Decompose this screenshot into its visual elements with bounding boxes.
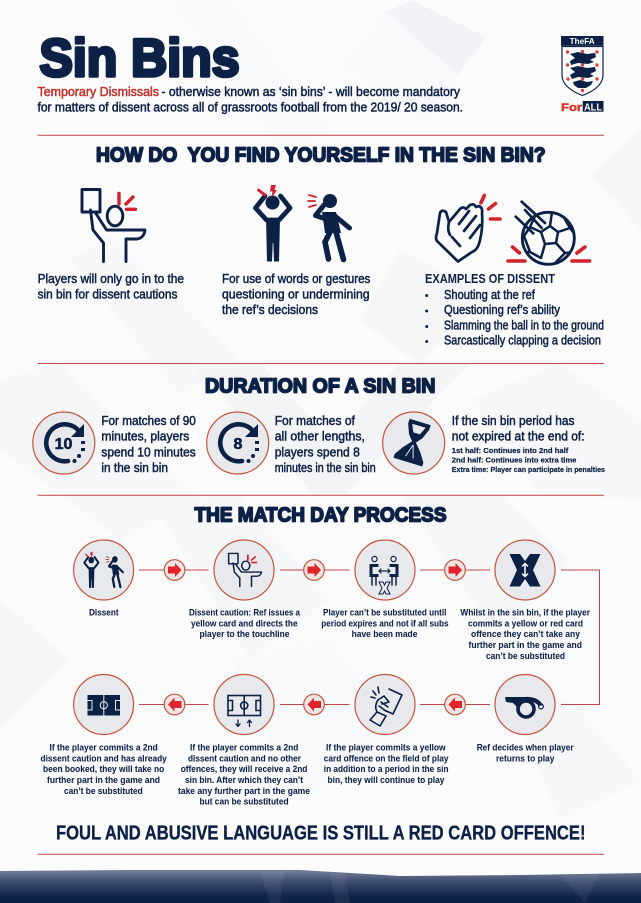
step: 2nd sin bin, outlined pitch: dissent caution and no other <box>188 752 301 764</box>
heading: duration of a sin bin: DURATION OF A SIN BIN <box>205 375 435 398</box>
step: 2nd caution already booked, filled pitch: can’t be substituted <box>64 785 143 796</box>
text: dissent cautions: Players will only go in to the <box>38 271 184 286</box>
panel: 90 minute matches <box>33 412 196 475</box>
step: substitution: have been made <box>352 628 417 639</box>
text: 8 minutes: players spend 8 <box>275 444 360 460</box>
step: dissent caution: yellow card and directs the <box>191 618 298 628</box>
heading: how do you find yourself in the sin bin: HOW DO YOU FIND YOURSELF IN THE SIN BIN? <box>96 144 546 167</box>
step: substitution: period expires and not if all subs <box>321 618 448 628</box>
icon: angry players <box>256 185 350 262</box>
step: ref decides, whistle: Ref decides when player <box>477 742 574 752</box>
step: substitution: Player can’t be substituted until <box>323 606 446 618</box>
logo: The FA For All crest <box>561 36 604 114</box>
icon: hourglass <box>383 412 445 474</box>
text: words or gestures: the ref’s decisions <box>222 302 318 317</box>
text: words or gestures: questioning or undermining <box>222 286 370 302</box>
step: whilst in the sin bin: commits a yellow or red card <box>468 618 583 628</box>
step: dissent caution <box>189 540 301 639</box>
text: 10 minutes: in the sin bin <box>101 460 168 475</box>
text: end of period rules: not expired at the end of: <box>452 428 585 444</box>
logo: The FA For All crest: For <box>561 102 583 114</box>
icon: 8 minute clock: 8 <box>234 436 243 453</box>
text: 8 minutes: all other lengths, <box>275 428 365 444</box>
text: 10 minutes: minutes, players <box>101 428 190 444</box>
text: examples of dissent: Questioning ref’s ability <box>444 302 560 317</box>
step: yellow card offence, hand with card: card offence on the field of play <box>324 752 449 764</box>
panel: dissent cautions <box>38 190 184 301</box>
step: 2nd caution already booked, filled pitch: further part in the game and <box>47 774 160 785</box>
text: examples of dissent: EXAMPLES OF DISSENT <box>425 271 555 286</box>
arrow: right 3 <box>445 560 465 580</box>
step: yellow card offence, hand with card <box>324 674 449 785</box>
intro text <box>38 84 463 114</box>
panel: examples of dissent <box>425 196 604 348</box>
text: 10 minutes <box>101 413 196 475</box>
arrow: left 3 <box>164 694 185 715</box>
text: dissent cautions <box>38 271 184 301</box>
text: examples of dissent: Shouting at the ref <box>444 287 535 302</box>
text: end of period rules: 1st half: Continues into 2nd half <box>452 446 569 455</box>
step: 2nd sin bin, outlined pitch: but can be substituted <box>200 796 289 806</box>
text: examples of dissent: Sarcastically clapping a decision <box>444 332 601 348</box>
panel: other match lengths <box>207 412 376 475</box>
icon: referee showing card <box>82 190 145 262</box>
step: whilst in the sin bin: Whilst in the sin bin, if the player <box>460 606 590 618</box>
step: 2nd sin bin, outlined pitch: If the player commits a 2nd <box>190 742 299 752</box>
icon: 10 minute clock <box>33 412 95 474</box>
step: 2nd sin bin, outlined pitch <box>178 674 310 806</box>
step: whilst in the sin bin: further part in the game and <box>468 639 582 650</box>
step: dissent: Dissent <box>89 606 119 618</box>
text: end of period rules <box>452 413 605 474</box>
step: substitution <box>321 540 448 639</box>
connector lines <box>139 570 600 704</box>
footer band <box>0 870 641 903</box>
step: 2nd caution already booked, filled pitch <box>40 674 167 796</box>
text: 10 minutes: For matches of 90 <box>101 413 196 428</box>
panel: words or gestures <box>222 185 371 317</box>
step: dissent <box>74 540 134 618</box>
step: 2nd sin bin, outlined pitch: take any further part in the game <box>178 785 310 796</box>
step: dissent caution: player to the touchline <box>200 628 290 639</box>
arrow: left 2 <box>304 694 324 715</box>
title: Sin Bins <box>40 29 240 88</box>
step: yellow card offence, hand with card: If the player commits a yellow <box>326 742 446 752</box>
intro text: for matters of dissent across all of grassroots football from the 2019/ 20 season. <box>38 100 463 114</box>
text: words or gestures: For use of words or gestures <box>222 271 371 286</box>
text: 8 minutes: For matches of <box>275 413 355 428</box>
text: dissent cautions: sin bin for dissent cautions <box>38 286 178 301</box>
arrow: right 1 <box>164 560 185 580</box>
step: whilst in the sin bin: can’t be substituted <box>486 650 565 661</box>
panel: period not expired <box>383 412 605 474</box>
intro text: Temporary Dismissals <box>38 84 159 99</box>
step: ref decides, whistle: returns to play <box>496 752 555 764</box>
intro text: - otherwise known as ‘sin bins’ - will become mandatory <box>162 84 460 99</box>
text: end of period rules: If the sin bin period has <box>452 413 575 428</box>
text: 8 minutes <box>275 413 376 475</box>
heading: the match day process: THE MATCH DAY PROCESS <box>194 504 446 527</box>
icon: clapping hands <box>436 196 500 262</box>
text: 8 minutes: minutes in the sin bin <box>275 460 376 475</box>
step: whilst in the sin bin <box>460 540 590 661</box>
text: end of period rules: Extra time: Player can participate in penalties <box>452 465 605 474</box>
icon: 10 minute clock: 10 <box>55 436 72 453</box>
arrow: left 1 <box>445 694 465 715</box>
step: ref decides, whistle <box>477 674 574 764</box>
text: examples of dissent: Slamming the ball in to the ground <box>444 318 604 332</box>
logo: The FA For All crest: ALL <box>584 102 602 113</box>
step: 2nd sin bin, outlined pitch: sin bin. After which they can’t <box>185 774 303 785</box>
step: yellow card offence, hand with card: in addition to a period in the sin <box>324 763 449 774</box>
step: whilst in the sin bin: offence they can’t take any <box>471 628 581 639</box>
step: 2nd caution already booked, filled pitch: been booked, they will take no <box>43 763 165 774</box>
step: 2nd caution already booked, filled pitch: dissent caution and has already <box>40 752 167 764</box>
step: 2nd sin bin, outlined pitch: offences, they will receive a 2nd <box>181 763 308 774</box>
icon: 8 minute clock <box>207 412 269 474</box>
text: 10 minutes: spend 10 minutes <box>101 444 196 460</box>
logo: The FA For All crest: TheFA <box>570 37 595 46</box>
arrow: right 2 <box>304 560 324 580</box>
text: examples of dissent <box>425 271 604 348</box>
text: end of period rules: 2nd half: Continues into extra time <box>452 456 576 464</box>
step: 2nd caution already booked, filled pitch: If the player commits a 2nd <box>50 742 158 752</box>
step: yellow card offence, hand with card: bin, they will continue to play <box>328 774 445 785</box>
text: words or gestures <box>222 271 371 317</box>
icon: ball slammed into ground <box>508 202 590 264</box>
step: dissent caution: Dissent caution: Ref issues a <box>189 606 301 618</box>
